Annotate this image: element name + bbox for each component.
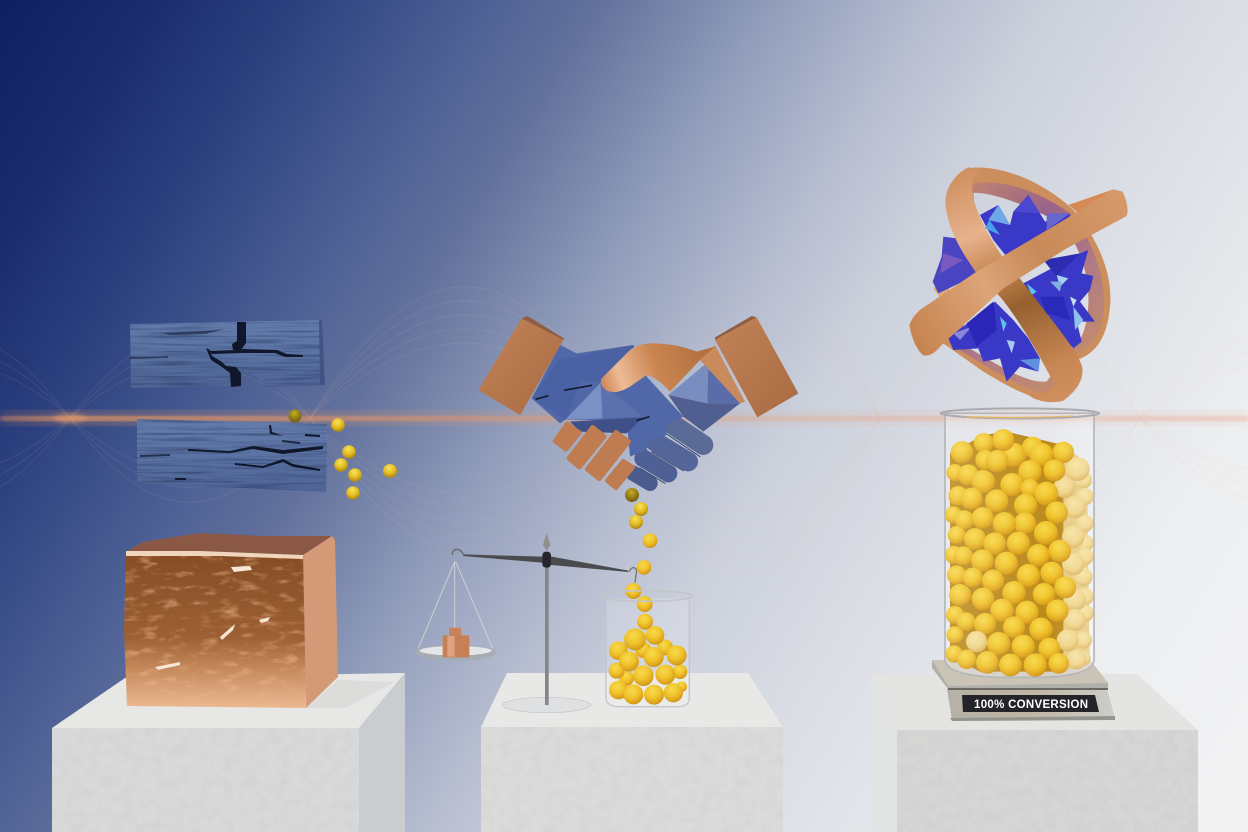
crystals [933, 195, 1095, 382]
blue fingers [633, 425, 703, 483]
right cuff [715, 316, 798, 417]
scale display [962, 695, 1099, 712]
beaker glass outline [599, 591, 693, 707]
copper strap [700, 345, 745, 403]
horizontal glow line [0, 411, 1248, 425]
diagonal ring front band [909, 189, 1128, 356]
wave interference lenses [0, 263, 1248, 573]
pivot [542, 552, 551, 568]
beam [463, 554, 628, 572]
pan [416, 645, 496, 661]
cracks in bottom plank [140, 425, 323, 480]
pale balls behind glass [1054, 457, 1094, 669]
gyroscope rings with crystals [909, 167, 1128, 402]
blue light facets [565, 383, 643, 433]
falling balls from plank [288, 410, 397, 500]
golden balls [945, 429, 1076, 677]
tilted ring inner wall [950, 182, 1104, 394]
left cuff [478, 316, 564, 415]
cracks in top plank [130, 322, 303, 387]
scale display: 100% CONVERSION [974, 699, 1088, 711]
pan strings [418, 562, 493, 648]
jar glass back [945, 413, 1094, 677]
base [503, 697, 591, 713]
copper block [124, 533, 338, 708]
ring front band [945, 167, 1083, 402]
diagonal ring back [933, 189, 1127, 297]
slits [536, 385, 649, 421]
right blue facets [668, 362, 740, 432]
small beaker of balls [599, 533, 693, 707]
jar glass outline [941, 408, 1099, 677]
ball pile backdrop [950, 432, 1089, 672]
copper weight [443, 628, 469, 657]
blue palm [532, 345, 683, 457]
beaker glass back [606, 598, 689, 707]
tilted ring outer shell [943, 168, 1110, 401]
stream of balls from hands [625, 488, 648, 529]
handshake [478, 316, 798, 488]
balls in small beaker [609, 533, 687, 705]
pole [545, 563, 549, 705]
weighing scale [932, 660, 1115, 721]
pedestal: middle [481, 673, 783, 832]
pedestal: left [52, 673, 405, 832]
copper thumb [601, 343, 715, 392]
pale front ball [966, 631, 987, 652]
pedestal: right [871, 674, 1198, 832]
balance scale [416, 533, 636, 713]
cracked plank: top [130, 320, 325, 388]
hooks [452, 549, 463, 555]
large jar of balls [941, 408, 1099, 677]
finial [543, 533, 550, 551]
copper fingers [555, 424, 633, 488]
cracked plank: bottom [137, 419, 327, 492]
